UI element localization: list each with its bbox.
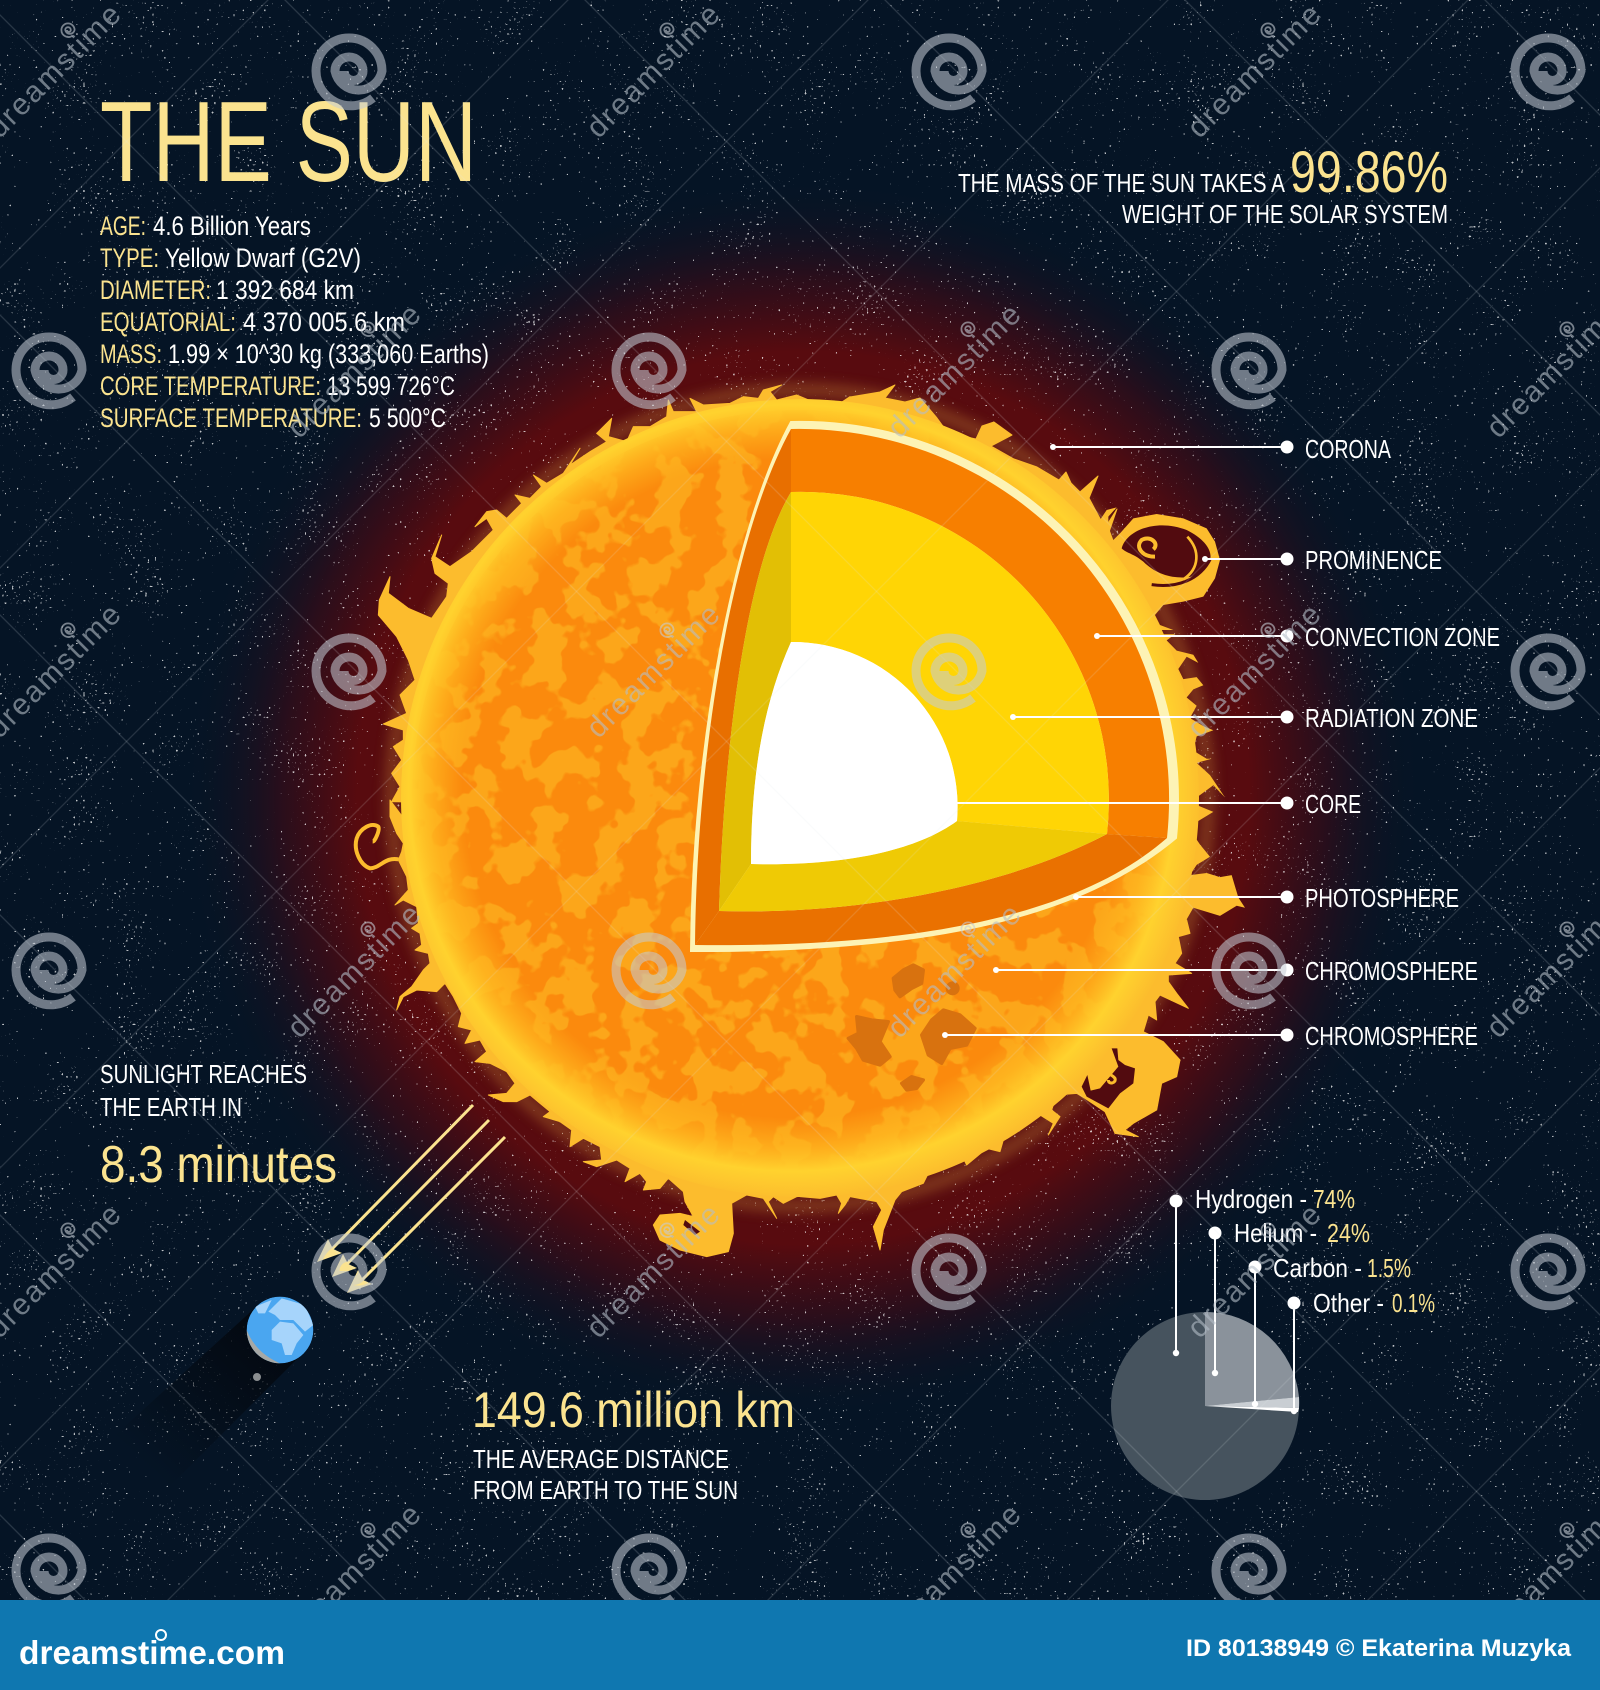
watermark: dreamstime <box>881 1498 1027 1644</box>
watermark: dreamstime <box>281 1498 427 1644</box>
sunspots <box>848 965 975 1090</box>
sun flares: lower left <box>356 800 840 1257</box>
sunlight travel time: SUNLIGHT REACHES <box>100 1059 307 1089</box>
callout: corona <box>1050 440 1294 454</box>
pie helium <box>1205 1312 1299 1406</box>
stats list: 1.99 × 10^30 kg (333,060 Earths) <box>168 339 489 369</box>
stats list: CORE TEMPERATURE: <box>100 371 321 401</box>
earth <box>126 1296 314 1464</box>
pie legend: Hydrogen - <box>1195 1184 1307 1214</box>
radiation zone left wall <box>719 492 791 911</box>
watermark: dreamstime <box>580 598 726 744</box>
distance: 149.6 million km <box>472 1382 795 1438</box>
sunlight travel time <box>100 1059 337 1194</box>
earth globe <box>247 1297 313 1363</box>
stats list: SURFACE TEMPERATURE: <box>100 403 362 433</box>
sun flares: top right <box>850 385 1125 700</box>
watermark: dreamstime <box>881 898 1027 1044</box>
composition pie chart <box>1111 1184 1435 1500</box>
mass callout: WEIGHT OF THE SOLAR SYSTEM <box>1122 199 1448 229</box>
callout: radiation zone <box>1010 710 1294 724</box>
pie legend <box>1195 1184 1435 1318</box>
watermark: dreamstime <box>1181 598 1327 744</box>
sun rim <box>402 400 1198 1196</box>
layer labels: PHOTOSPHERE <box>1305 883 1459 913</box>
radiation zone bottom wall <box>719 821 1107 911</box>
watermark: dreamstime <box>580 1198 726 1344</box>
layer labels: CHROMOSPHERE <box>1305 956 1478 986</box>
pie legend: 74% <box>1313 1184 1355 1214</box>
radiation zone <box>791 492 1109 834</box>
pie hydrogen <box>1111 1312 1299 1500</box>
stats list: 13 599 726°C <box>327 371 455 401</box>
pie other <box>1205 1406 1299 1412</box>
watermark: dreamstime <box>281 298 427 444</box>
stats list: Yellow Dwarf (G2V) <box>165 243 361 273</box>
layer labels <box>1305 434 1500 1051</box>
pie legend: 1.5% <box>1367 1253 1411 1283</box>
sunlight travel time: 8.3 minutes <box>100 1136 337 1194</box>
sunlight arrows <box>317 1105 505 1293</box>
pie legend: 0.1% <box>1392 1288 1435 1318</box>
callout lines <box>942 440 1294 1042</box>
watermark: dreamstime <box>281 898 427 1044</box>
core <box>751 642 958 864</box>
convection zone face <box>791 429 1169 838</box>
layer labels: RADIATION ZONE <box>1305 703 1478 733</box>
pie legend: Other - <box>1313 1288 1384 1318</box>
earth shadow <box>110 1306 304 1486</box>
convection zone left wall <box>695 429 791 945</box>
stats list <box>100 211 489 433</box>
stats list: 5 500°C <box>369 403 446 433</box>
sun surface <box>412 410 1188 1186</box>
arrow 3 <box>347 1137 505 1293</box>
moon <box>253 1373 261 1381</box>
sun flares: upper left <box>378 385 850 803</box>
stats list: MASS: <box>100 339 162 369</box>
sun flares: right side <box>1083 634 1245 928</box>
distance <box>472 1382 795 1505</box>
stats list: DIAMETER: <box>100 275 211 305</box>
sunlight travel time: THE EARTH IN <box>100 1092 242 1122</box>
convection zone bottom wall <box>695 834 1167 945</box>
callout: chromosphere 2 <box>942 1028 1294 1042</box>
arrow 1 <box>317 1105 473 1262</box>
footer credit: ID 80138949 © Ekaterina Muzyka <box>1186 1635 1572 1662</box>
layer labels: CONVECTION ZONE <box>1305 622 1500 652</box>
callout: prominence <box>1202 552 1294 566</box>
pie legend: Helium - <box>1234 1218 1317 1248</box>
arrow 2 <box>332 1120 489 1277</box>
stats list: TYPE: <box>100 243 159 273</box>
callout: convection zone <box>1094 630 1294 642</box>
stats list: 1 392 684 km <box>216 275 354 305</box>
pie legend: 24% <box>1327 1218 1370 1248</box>
sun cross-section wedge <box>691 422 1178 951</box>
stats list: 4.6 Billion Years <box>153 211 311 241</box>
mass callout <box>958 140 1448 229</box>
callout: photosphere <box>1073 890 1294 904</box>
stats list: 4 370 005.6 km <box>243 307 405 337</box>
sun edge haze <box>392 390 1208 1206</box>
stats list: EQUATORIAL: <box>100 307 236 337</box>
distance: FROM EARTH TO THE SUN <box>473 1475 738 1505</box>
footer bar <box>0 1600 1600 1690</box>
mass callout: 99.86% <box>1290 140 1448 205</box>
watermark: dreamstime <box>881 298 1027 444</box>
watermark: dreamstime <box>1181 1198 1327 1344</box>
sun <box>356 385 1245 1257</box>
watermark: dreamstime <box>1181 0 1327 144</box>
sun flares: lower right <box>800 887 1192 1250</box>
callout: core <box>957 796 1294 810</box>
watermark: dreamstime <box>580 0 726 144</box>
pie leaders <box>1170 1194 1300 1414</box>
stats list: AGE: <box>100 211 146 241</box>
layer labels: PROMINENCE <box>1305 545 1442 575</box>
mass callout: THE MASS OF THE SUN TAKES A <box>958 168 1286 198</box>
layer labels: CHROMOSPHERE <box>1305 1021 1478 1051</box>
callout: chromosphere <box>993 964 1294 976</box>
title: THE SUN <box>100 79 477 206</box>
sun edge glow <box>401 399 1199 1197</box>
pie legend: Carbon - <box>1273 1253 1362 1283</box>
distance: THE AVERAGE DISTANCE <box>473 1444 729 1474</box>
layer labels: CORE <box>1305 789 1361 819</box>
pie carbon <box>1205 1397 1299 1408</box>
footer logo: dreamstime.com <box>19 1634 285 1671</box>
layer labels: CORONA <box>1305 434 1391 464</box>
prominence <box>1067 507 1220 630</box>
